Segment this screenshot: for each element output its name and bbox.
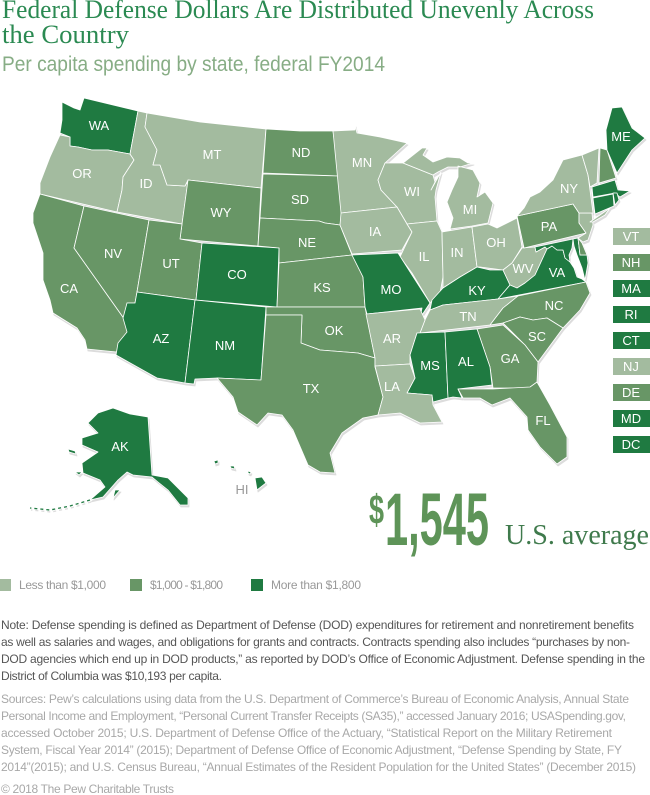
key: NH: NH <box>622 255 640 270</box>
state: NV <box>74 206 149 320</box>
state: ME <box>606 107 645 173</box>
state: NE <box>258 218 352 263</box>
key: VT <box>613 228 650 245</box>
state: KY: KY <box>468 283 486 298</box>
state: GA: GA <box>501 351 520 366</box>
state: CA <box>33 194 128 352</box>
state: ME: ME <box>611 129 631 144</box>
callout: U.S. average: U.S. average <box>505 519 649 551</box>
key: NH <box>613 254 650 271</box>
state: NH <box>599 148 616 183</box>
key: DC: DC <box>622 437 640 452</box>
state: PA: PA <box>541 219 558 234</box>
state: PA <box>517 204 586 248</box>
state: AZ: AZ <box>153 331 169 346</box>
sources text: System, Fiscal Year 2014” (2015); Department of Defense Office of Economic Adjustment, “Defense Spending by State, FY <box>1 743 622 757</box>
title <box>2 0 594 49</box>
state: MI: MI <box>463 202 477 217</box>
key: MA <box>613 280 650 297</box>
sources text: 2014”(2015); and U.S. Census Bureau, “Annual Estimates of the Resident Population for the United States” (December 2015) <box>1 760 636 774</box>
state: MN <box>333 125 407 213</box>
key: MD <box>613 410 650 427</box>
state: NY: NY <box>560 181 578 196</box>
state: CA: CA <box>60 281 78 296</box>
state: MD <box>535 238 588 280</box>
title: the Country <box>2 20 129 49</box>
state: NM <box>185 300 266 384</box>
state: OK: OK <box>325 323 344 338</box>
state: OH: OH <box>486 235 506 250</box>
state: SD <box>260 174 342 225</box>
state: AZ <box>116 292 195 383</box>
sources text <box>1 692 636 774</box>
key: CT: CT <box>622 333 640 348</box>
state: WI <box>378 163 441 224</box>
state: ID: ID <box>140 176 152 191</box>
state: MA <box>592 180 630 197</box>
key: RI <box>613 306 650 323</box>
state: AL <box>445 329 492 398</box>
state: OR <box>40 135 134 212</box>
state: MO <box>352 253 430 318</box>
key: DE <box>613 384 650 401</box>
key: VT: VT <box>623 229 639 244</box>
state: KS: KS <box>313 280 331 295</box>
sources text: Personal Income and Employment, “Personal Current Transfer Receipts (SA35),” accessed January 2016; USASpending.gov, <box>1 709 626 723</box>
state: NY <box>517 155 610 222</box>
state: SC <box>503 317 563 362</box>
note text: DOD agencies which end up in DOD products,” as reported by DOD’s Office of Economic Adjustment. Defense spending in the <box>1 652 645 666</box>
state: FL: FL <box>535 413 551 428</box>
state: TX: TX <box>303 381 320 396</box>
state: FL <box>458 382 567 464</box>
key: NJ: NJ <box>623 359 639 374</box>
state: KS <box>277 255 365 307</box>
state: HI <box>214 460 266 490</box>
state: NE: NE <box>298 235 316 250</box>
state: NM: NM <box>215 338 235 353</box>
state: IL <box>400 221 443 303</box>
state: AK: AK <box>111 439 129 454</box>
state: WA: WA <box>89 118 110 133</box>
map of the United States <box>30 98 645 510</box>
state: VT <box>582 148 599 187</box>
state: MN: MN <box>352 155 372 170</box>
state: NC <box>490 282 590 328</box>
state: CT <box>593 194 614 214</box>
state: ID <box>117 111 188 224</box>
key: MD: MD <box>621 411 641 426</box>
state: WY <box>180 180 261 246</box>
sources text: accessed October 2015; U.S. Department of Defense Office of the Actuary, “Statistical Report on the Military Retirement <box>1 726 613 740</box>
legend item: more than $1,800: More than $1,800 <box>271 578 361 592</box>
state: NV: NV <box>104 246 122 261</box>
state: WA <box>60 98 138 154</box>
state: AR: AR <box>383 331 401 346</box>
state: NC: NC <box>545 298 563 313</box>
state: IN <box>442 227 477 288</box>
state: WV: WV <box>513 261 534 276</box>
state: ND <box>263 129 339 176</box>
state: OR: OR <box>72 166 92 181</box>
state: WI: WI <box>404 184 420 199</box>
state: MS: MS <box>420 358 440 373</box>
state: MT <box>145 113 266 188</box>
legend item: $1,000 - $1,800: $1,000 - $1,800 <box>150 578 223 592</box>
state: GA <box>477 325 538 388</box>
state: CO <box>196 243 279 307</box>
note text: District of Columbia was $10,193 per capita. <box>1 669 222 683</box>
subtitle: Per capita spending by state, federal FY2014 <box>2 53 385 76</box>
state: TN <box>420 296 518 333</box>
state: KY <box>430 267 510 310</box>
sources text: Sources: Pew’s calculations using data from the U.S. Department of Commerce’s Bureau of Economic Analysis, Annual State <box>1 692 629 706</box>
state: VA <box>498 246 586 299</box>
state: IN: IN <box>450 245 464 260</box>
state: MO: MO <box>381 282 401 297</box>
state: WY: WY <box>211 205 232 220</box>
note text: Note: Defense spending is defined as Department of Defense (DOD) expenditures for retirement and nonretirement benefits <box>1 618 634 632</box>
legend item: less than $1,000: Less than $1,000 <box>19 578 106 592</box>
legend <box>0 578 361 592</box>
state: IL: IL <box>419 249 429 264</box>
note text <box>1 618 645 683</box>
state: OH <box>472 218 522 270</box>
key: RI: RI <box>624 307 638 322</box>
state: TX <box>217 315 383 473</box>
state: LA <box>375 364 442 423</box>
key: DE: DE <box>622 385 640 400</box>
state: IA <box>340 207 412 254</box>
key: CT <box>613 332 650 349</box>
map labels: northeast small states key <box>613 228 650 453</box>
state: VA: VA <box>549 265 566 280</box>
state: NJ <box>578 213 593 242</box>
state: IA: IA <box>369 224 381 239</box>
state: LA: LA <box>384 379 400 394</box>
key: NJ <box>613 358 650 375</box>
state: WV <box>503 247 547 288</box>
state: MS <box>407 332 448 402</box>
note text: as well as salaries and wages, and obligations for grants and contracts. Contracts spending also includes “purchases by non- <box>1 635 630 649</box>
state: RI <box>613 193 619 205</box>
key: MA: MA <box>621 281 641 296</box>
label: HI: HI <box>236 482 248 497</box>
callout: U.S. average: 1,545 <box>385 478 489 561</box>
state: MT: MT <box>203 147 221 162</box>
state: UT <box>137 220 202 300</box>
state: CO: CO <box>227 267 247 282</box>
key: DC <box>613 436 650 453</box>
state: AK <box>30 408 188 510</box>
state: SC: SC <box>528 329 546 344</box>
state: TN: TN <box>459 309 477 324</box>
state: DE <box>578 238 587 255</box>
callout: U.S. average <box>369 478 649 561</box>
state: AR <box>366 309 425 366</box>
state: SD: SD <box>291 192 309 207</box>
state: UT: UT <box>162 256 180 271</box>
state: AL: AL <box>458 354 474 369</box>
state: ND: ND <box>292 145 310 160</box>
state: MI <box>403 148 493 229</box>
callout: U.S. average: $ <box>369 486 384 533</box>
state: OK <box>266 307 375 358</box>
